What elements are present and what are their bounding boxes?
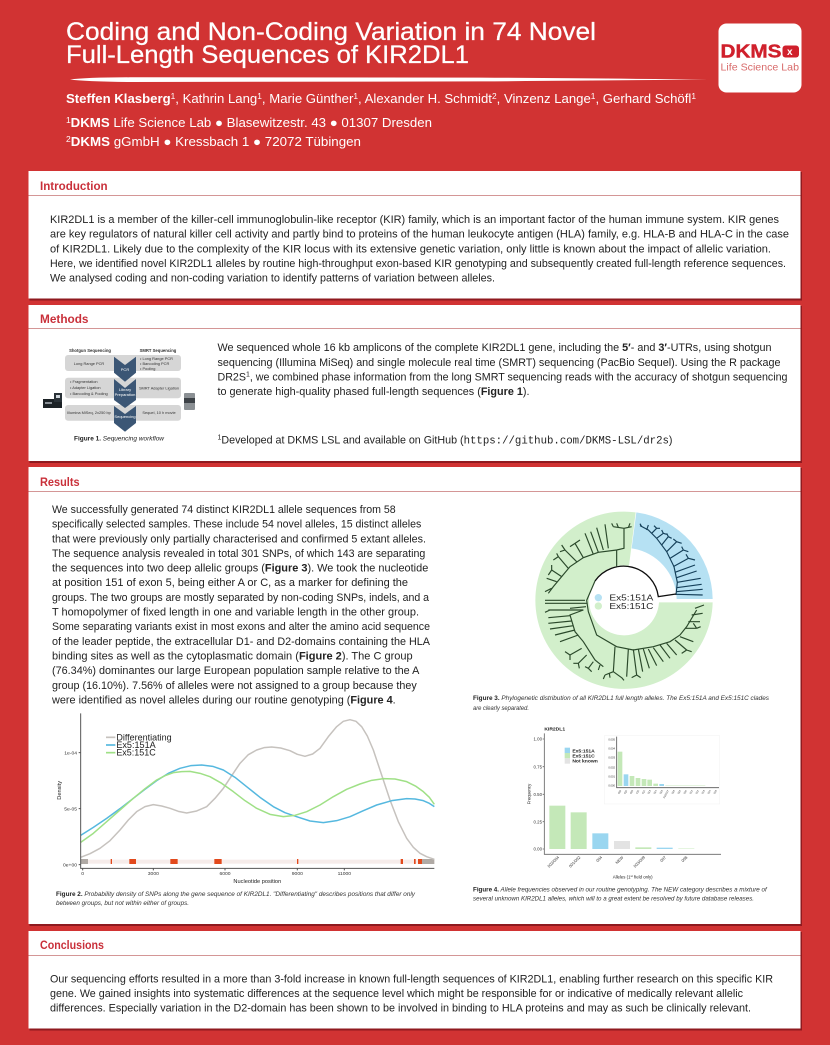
figure 1: sequencing workflow: • Long Range PCR xyxy=(140,356,173,361)
inset chart: 011 xyxy=(636,789,641,795)
curve: differentiating xyxy=(81,720,434,859)
introduction text: are key regulators of natural killer cell activity and partly bind to proteins of the human leukocyte antigen (HLA) family, e.g. HLA-B and HLA-C in the case xyxy=(50,229,789,241)
tree branches: Ex5:151A clade xyxy=(640,524,703,595)
inset chart: 020 xyxy=(683,789,688,795)
x tick labels: NEW xyxy=(614,855,625,865)
heading: results: Results xyxy=(40,475,80,489)
y tick labels: 1.00 xyxy=(534,737,543,742)
x tick labels: 007 xyxy=(659,854,668,863)
inset chart: 025 xyxy=(713,789,718,795)
panel: conclusions xyxy=(28,931,802,1030)
footnote: 1 xyxy=(218,432,221,442)
affiliation 2: DKMS xyxy=(71,135,110,149)
legend: Ex5:151C xyxy=(572,753,595,759)
figure 1: sequencing workflow: • Fragmentation xyxy=(70,379,98,384)
authors: , Vinzenz Lange xyxy=(497,92,591,106)
figure 2 caption: between groups, but not within either of groups. xyxy=(56,900,189,907)
authors: , Gerhard Schöfl xyxy=(595,92,691,106)
tree root xyxy=(595,566,676,597)
inset chart xyxy=(604,736,720,804)
bars xyxy=(549,806,694,849)
panel: methods xyxy=(28,305,802,463)
figure 4 caption xyxy=(473,887,768,903)
figure 1: sequencing workflow: Shotgun Sequencing xyxy=(69,348,111,353)
methods text xyxy=(218,342,788,398)
inset chart: 006 xyxy=(618,789,623,795)
conclusions text xyxy=(50,974,773,1015)
authors: , Marie Günther xyxy=(262,92,353,106)
logo: DKMS Life Science Lab: DKMS xyxy=(720,41,782,61)
inset chart: 010 xyxy=(624,789,629,795)
axis tick labels: 5e-05 xyxy=(64,806,77,812)
legend: Ex5:151C xyxy=(116,748,156,758)
axes xyxy=(543,733,721,854)
x tick labels xyxy=(546,854,689,869)
introduction text: KIR2DL1 is a member of the killer-cell immunoglobulin-like receptor (KIR) family, which is an important factor of the human immune system. KIR genes xyxy=(50,214,779,226)
figure 1: sequencing workflow: Library xyxy=(119,387,131,392)
authors: 1 xyxy=(691,92,697,101)
figure 2 caption xyxy=(56,891,416,907)
chart title: KIR2DL1 xyxy=(544,726,565,732)
inset chart: 012 xyxy=(642,789,647,795)
figure 1: sequencing workflow: Illumina MiSeq, 2x250 bp xyxy=(67,410,111,415)
authors: 2 xyxy=(492,92,497,101)
figure 1: sequencing workflow: • Barcoding & Pooling xyxy=(70,391,108,396)
heading: methods: Methods xyxy=(40,312,89,326)
axis titles xyxy=(57,781,281,885)
panel: introduction xyxy=(28,171,802,300)
conclusions text: differences. Especially variation in the D2-domain has been shown to be involved in binding to HLA proteins and may as such be clinically relevant. xyxy=(50,1003,751,1015)
inset chart: 0.004 xyxy=(608,746,616,750)
logo: DKMS Life Science Lab xyxy=(718,24,802,92)
axis titles: Nucleotide position xyxy=(233,879,281,885)
authors: 1 xyxy=(171,92,176,101)
inset chart: 0.001 xyxy=(608,775,616,779)
methods text: 1 xyxy=(246,370,250,378)
inset chart: 018 xyxy=(671,789,676,795)
results text: T homopolymer of fixed length in one and variable length in the other group. xyxy=(52,606,419,618)
inset chart: 015 xyxy=(659,789,664,795)
results text: specifically selected samples. These include 54 novel alleles, 15 distinct alleles xyxy=(52,519,422,531)
curve: Ex5:151C xyxy=(81,771,434,842)
axis tick labels: 11000 xyxy=(338,871,351,877)
inset chart: 0.000 xyxy=(608,784,616,788)
authors: 1 xyxy=(353,92,359,101)
title underline swoosh xyxy=(70,77,708,82)
figure 1: sequencing workflow: SMRT Adapter Ligation xyxy=(139,386,179,390)
figure 1: sequencing workflow: • Adapter Ligation xyxy=(70,385,101,390)
axis tick labels: 0 xyxy=(81,871,84,877)
results text: Some separating variants exist in most exons and alter the amino acid sequence xyxy=(52,621,430,633)
methods text: to generate high-quality phased full-length sequences (Figure 1). xyxy=(218,386,530,398)
figure 3 caption xyxy=(473,695,770,712)
figure 4: allele frequency chart xyxy=(527,726,721,879)
title xyxy=(66,18,596,69)
results text: were identified as novel alleles during our routine genotyping (Figure 4. xyxy=(51,695,396,707)
legend: Ex5:151A xyxy=(572,748,595,754)
figure 4 caption: several unknown KIR2DL1 alleles, which will to a great extent be resolved by future database releases. xyxy=(473,896,754,903)
tree legend: Ex5:151C xyxy=(609,601,653,611)
methods text: , we combined phase information from the long SMRT sequencing reads with the accuracy of shotgun sequencing xyxy=(250,372,788,384)
y tick labels: 0.00 xyxy=(534,847,543,852)
curve: Ex5:151A xyxy=(81,765,434,835)
rug: SNP positions xyxy=(81,859,434,864)
inset chart: 005 xyxy=(630,789,635,795)
introduction text: We analysed coding and non-coding variation to identify patterns of variation between alleles. xyxy=(50,273,495,285)
methods text: DR2S xyxy=(218,372,248,384)
figure 4 caption: Figure 4. Allele frequencies observed in our routine genotyping. The NEW category describes a mixture of xyxy=(473,887,768,894)
results text: We successfully generated 74 distinct KIR2DL1 allele sequences from 58 xyxy=(52,504,396,516)
inset chart: 024 xyxy=(707,789,712,795)
axes xyxy=(79,713,434,870)
figure 3: phylogenetic tree xyxy=(535,512,713,689)
figure 3 caption: Figure 3. Phylogenetic distribution of all KIR2DL1 full length alleles. The Ex5:151A and Ex5:151C clades xyxy=(473,695,770,702)
clade wedge: Ex5:151C xyxy=(535,512,713,689)
methods text: We sequenced whole 16 kb amplicons of the complete KIR2DL1 gene, including the 5′- and 3′-UTRs, using shotgun xyxy=(218,342,771,354)
inset chart: 0.003 xyxy=(608,756,616,760)
logo: DKMS Life Science Lab: x xyxy=(787,47,793,58)
legend xyxy=(106,732,172,758)
conclusions text: gene. We gained insights into systematic differences at the sequence level which might be responsible for or indicative of medically relevant allelic xyxy=(50,988,743,1000)
results text: groups. The two groups are mostly separated by non-coding SNPs, indels, and a xyxy=(52,592,430,604)
results text: The sequence analysis revealed in total 301 SNPs, of which 143 are separating xyxy=(52,548,425,560)
axis titles: Density xyxy=(57,781,63,800)
inset chart: 0.005 xyxy=(608,737,616,741)
authors: 1 xyxy=(591,92,596,101)
results text: the sequences into two deep allelic groups (Figure 3). We took the nucleotide xyxy=(52,563,428,575)
inset chart: 022 xyxy=(695,789,700,795)
authors: 1 xyxy=(257,92,262,101)
legend: Differentiating xyxy=(116,732,172,742)
y tick labels xyxy=(534,737,543,852)
inset chart: 0.002 xyxy=(608,765,616,769)
figure 2 caption: Figure 2. Probability density of SNPs along the gene sequence of KIR2DL1. "Differentiating" describes positions that differ only xyxy=(56,891,416,898)
affiliation 2: gGmbH ● Kressbach 1 ● 72072 Tübingen xyxy=(113,135,347,149)
footnote xyxy=(218,432,673,448)
logo: DKMS Life Science Lab: Life Science Lab xyxy=(720,62,799,73)
results text: (76.34%) dominantes our large European population sample relative to the A xyxy=(52,665,420,677)
legend: Ex5:151A xyxy=(116,740,156,750)
axis titles: Alleles (1 xyxy=(613,874,631,879)
affiliation 1: Life Science Lab ● Blasewitzestr. 43 ● 01307 Dresden xyxy=(113,116,416,130)
axis tick labels: 1e-04 xyxy=(64,750,77,756)
x tick labels: 008 xyxy=(680,854,689,863)
legend: Not known xyxy=(572,758,598,764)
results text xyxy=(51,504,430,707)
x tick labels: 001/002 xyxy=(568,854,582,869)
inset chart: 016/017 xyxy=(663,789,670,799)
figure 1: sequencing workflow: PCR xyxy=(121,367,129,372)
results text: at position 151 of exon 5, being either A or C, as a marker for defining the xyxy=(52,577,408,589)
figure 1: sequencing workflow: SMRT Sequencing xyxy=(140,348,177,353)
figure 1 caption: Figure 1. Sequencing workflow xyxy=(74,436,165,443)
tree legend: Ex5:151A xyxy=(609,592,654,602)
clade wedge: Ex5:151A xyxy=(632,512,713,599)
footnote: https://github.com/DKMS-LSL/dr2s) xyxy=(464,434,682,448)
axis titles: Frequency xyxy=(527,783,532,804)
figure 2: SNP density chart xyxy=(57,713,434,885)
figure 1: sequencing workflow: Sequencing xyxy=(114,414,136,419)
y tick labels: 0.75 xyxy=(534,764,543,769)
x tick labels: 003/009 xyxy=(632,854,647,869)
inset chart: 023 xyxy=(701,789,706,795)
figure 1: sequencing workflow: Sequel, 10 h movie xyxy=(142,410,176,415)
heading: conclusions: Conclusions xyxy=(40,938,104,952)
header xyxy=(66,18,708,149)
figure 1: sequencing workflow: • Pooling xyxy=(140,366,155,371)
footnote: Developed at DKMS LSL and available on GitHub ( xyxy=(221,434,464,446)
figure 3 caption: are clearly separated. xyxy=(473,705,529,712)
axis tick labels xyxy=(63,750,351,877)
axis titles xyxy=(527,783,653,879)
tree legend xyxy=(595,592,654,611)
x tick labels: 002/004 xyxy=(546,854,561,869)
figure 1: sequencing workflow: Preparation xyxy=(115,392,135,397)
introduction text: Here, we identified novel KIR2DL1 alleles by routine high-throughput exon-based KIR genotyping and subsequently created full-length reference sequences. xyxy=(50,258,786,270)
tree branches: Ex5:151C clade xyxy=(545,523,704,680)
authors: , Alexander H. Schmidt xyxy=(358,92,492,106)
affiliation 2: 2 xyxy=(66,135,71,144)
y tick labels: 0.50 xyxy=(534,792,543,797)
results text: that were previously only partially characterised and confirmed 5 extant alleles. xyxy=(52,533,426,545)
axis tick labels: 9000 xyxy=(292,871,303,877)
axis titles: st xyxy=(631,874,633,878)
authors: , Kathrin Lang xyxy=(175,92,257,106)
x tick labels: 004 xyxy=(595,854,604,863)
legend xyxy=(565,748,598,764)
axis tick labels: 0e+00 xyxy=(63,862,77,868)
inset chart: 013 xyxy=(647,789,652,795)
heading: introduction: Introduction xyxy=(40,179,108,193)
methods text: sequencing (Illumina MiSeq) and single molecule real time (SMRT) sequencing (PacBio Sequel). Using the R package xyxy=(218,357,780,369)
panel: results xyxy=(28,467,802,926)
inset chart: 021 xyxy=(689,789,694,795)
inset chart: 019 xyxy=(677,789,682,795)
inset chart: 014 xyxy=(653,789,658,795)
title: Coding and Non-Coding Variation in 74 Novel xyxy=(66,18,596,46)
figure 1: sequencing workflow: Long Range PCR xyxy=(74,361,104,366)
y tick labels: 0.25 xyxy=(534,819,543,824)
introduction text: of KIR2DL1. Likely due to the complexity of the KIR locus with its extensive genetic variation, only little is known about the impact of allelic variation. xyxy=(50,243,771,255)
axis tick labels: 6000 xyxy=(219,871,231,877)
affiliation 1: 1 xyxy=(66,116,71,125)
title: Full-Length Sequences of KIR2DL1 xyxy=(66,41,469,69)
figure 1: sequencing workflow: • Barcoding PCR xyxy=(140,361,169,366)
figure 1: sequencing workflow xyxy=(43,348,195,432)
affiliation 1: DKMS xyxy=(71,116,110,130)
conclusions text: Our sequencing efforts resulted in a more than 3-fold increase in known full-length sequences of KIR2DL1, enabling further research on this specific KIR xyxy=(50,974,773,986)
results text: binding sites as well as the cytoplasmatic domain (Figure 2). The C group xyxy=(52,650,413,662)
axis tick labels: 3000 xyxy=(148,871,159,877)
results text: group (16.10%). 7.56% of alleles were not assigned to a group because they xyxy=(52,680,417,692)
introduction text xyxy=(50,214,789,285)
results text: of the leader peptide, the extracellular D1- and D2-domains containing the HLA xyxy=(52,636,430,648)
axis titles: field only) xyxy=(633,874,653,879)
authors: Steffen Klasberg xyxy=(66,92,171,106)
